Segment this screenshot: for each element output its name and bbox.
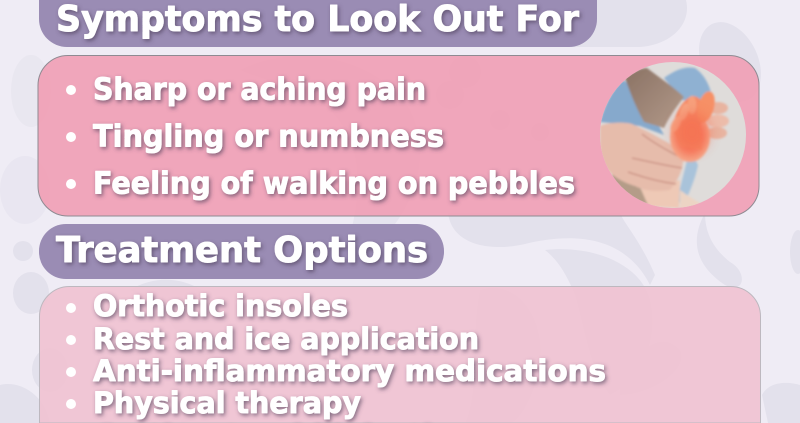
- treatment list: Anti-inflammatory medications: [93, 354, 606, 388]
- heading text: Symptoms to Look Out For: [56, 0, 579, 40]
- panel: symptoms: [38, 56, 759, 216]
- symptom list: Tingling or numbness: [93, 120, 444, 154]
- treatment bullets: [66, 303, 76, 409]
- heading text: Treatment Options: [56, 230, 428, 271]
- treatment list: [93, 289, 606, 423]
- header: treatment options: [39, 224, 444, 279]
- photo: hands holding a painful foot: [600, 62, 746, 212]
- treatment list: Orthotic insoles: [93, 289, 348, 323]
- panel: treatment options: [40, 286, 760, 423]
- treatment list: Rest and ice application: [93, 322, 479, 356]
- symptom bullets: [66, 85, 76, 189]
- treatment list: Physical therapy: [93, 386, 361, 420]
- header: symptoms: [39, 0, 597, 47]
- symptom list: [93, 72, 575, 202]
- symptom list: Feeling of walking on pebbles: [93, 166, 575, 202]
- symptom list: Sharp or aching pain: [93, 72, 426, 108]
